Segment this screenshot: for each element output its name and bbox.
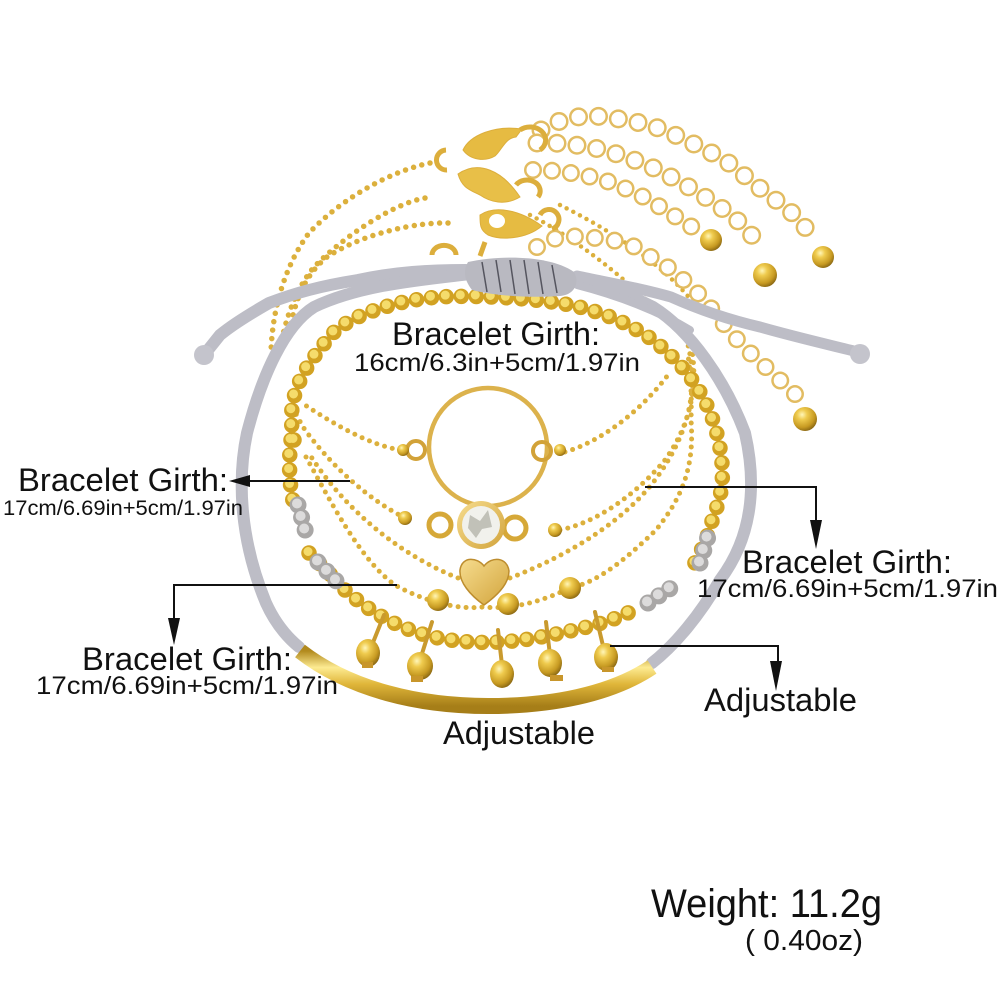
crystal chains <box>290 340 694 530</box>
bracelet: open ring pendant <box>305 375 668 506</box>
bracelet: crystal pendant <box>290 340 694 549</box>
curved gold tube <box>300 651 652 706</box>
bracelet: heart pendant <box>310 345 692 605</box>
label: lower left bracelet girth: 17cm/6.69in+5cm/1.97in <box>36 672 338 700</box>
heart chains <box>310 345 692 578</box>
clasp 2 <box>458 168 520 202</box>
arrow: to right label <box>645 487 822 549</box>
label: weight: Weight: 11.2g <box>651 882 882 926</box>
label: adjustable centre: Adjustable <box>443 715 595 751</box>
extender chain 4 <box>537 236 796 395</box>
charm loops <box>372 612 604 665</box>
clasp 1 <box>463 128 522 159</box>
arrow: to lower left label <box>168 585 397 645</box>
ring connectors <box>407 441 551 460</box>
arrow: to right adjustable label <box>610 646 782 691</box>
charm drops <box>356 612 618 688</box>
label: right bracelet girth <box>697 544 998 603</box>
woven knot <box>465 258 576 297</box>
extender chain 3 <box>533 170 700 232</box>
label: right bracelet girth: 17cm/6.69in+5cm/1.97in <box>697 575 998 603</box>
bracelet: gold and grey beads <box>289 295 722 642</box>
gold bead strand <box>290 296 722 642</box>
crystal stone <box>457 501 505 549</box>
label: adjustable right: Adjustable <box>704 682 857 718</box>
label: right bracelet girth: Bracelet Girth: <box>742 544 952 580</box>
label: lower left bracelet girth: Bracelet Girth: <box>82 641 292 677</box>
charm caps <box>362 662 614 682</box>
upper bead chains <box>271 163 695 353</box>
label: weight: ( 0.40oz) <box>745 925 863 957</box>
right loose strands <box>577 276 862 353</box>
label: left bracelet girth: 17cm/6.69in+5cm/1.97in <box>3 497 243 520</box>
chain balls <box>427 577 581 615</box>
label: top bracelet girth: Bracelet Girth: <box>392 316 600 352</box>
label: weight <box>651 882 882 957</box>
clasp connector rings <box>432 127 559 256</box>
left loose strand <box>204 270 466 355</box>
chain strand <box>306 355 692 608</box>
label: top bracelet girth: 16cm/6.3in+5cm/1.97in <box>354 349 640 377</box>
extender chains <box>533 116 812 395</box>
grey cord bracelet <box>194 270 870 663</box>
gold ring <box>429 388 547 506</box>
bracelet: beaded chain <box>306 355 692 615</box>
ring chains <box>305 375 668 452</box>
charm balls <box>356 639 618 688</box>
main cord loop <box>242 274 470 647</box>
extender chain 1 <box>541 116 812 235</box>
extender chain 2 <box>537 143 763 247</box>
lobster clasps <box>432 127 559 256</box>
arrow: to left label <box>229 475 350 487</box>
heart charm <box>460 559 509 605</box>
cord end knots <box>194 345 214 365</box>
label: top bracelet girth <box>354 316 640 377</box>
extender end balls <box>700 229 834 431</box>
crystal connectors <box>429 514 526 539</box>
clasp 3 <box>480 210 542 238</box>
clasp 3 opening <box>489 214 505 228</box>
label: left bracelet girth: Bracelet Girth: <box>18 462 228 498</box>
label: lower left bracelet girth <box>36 641 338 700</box>
grey bead segments <box>298 505 710 603</box>
label: left bracelet girth <box>3 462 243 520</box>
